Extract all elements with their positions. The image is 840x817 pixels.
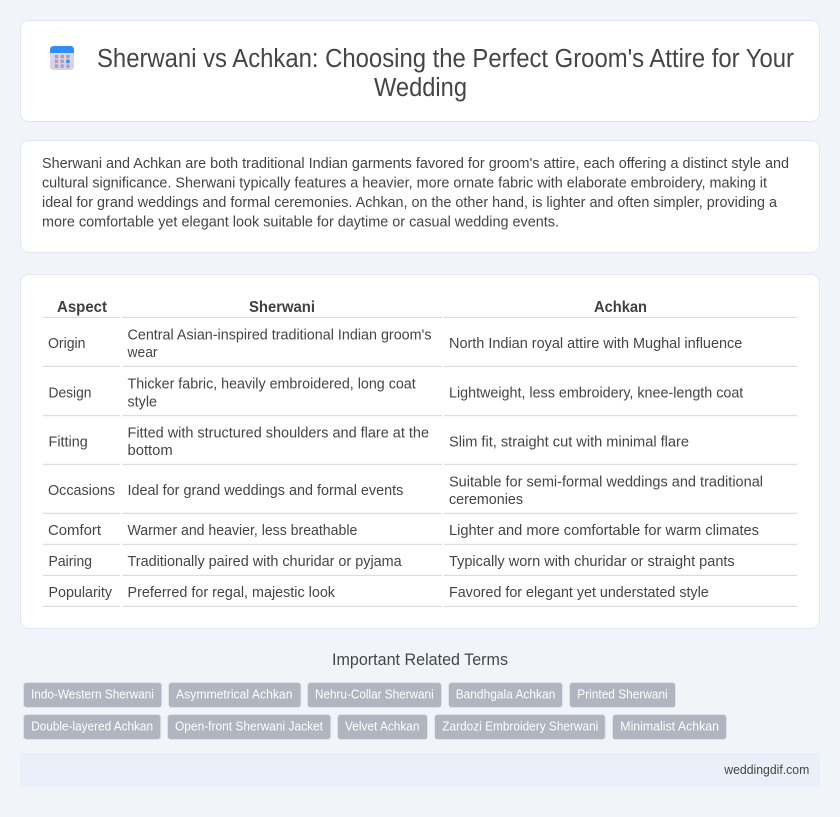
tag: Velvet Achkan: Velvet Achkan [345,719,420,734]
row: pairing: Pairing [48,554,92,570]
row: popularity: Popularity [48,585,113,601]
row: comfort: Warmer and heavier, less breathable [128,523,357,539]
row: comfort: Comfort [48,523,101,539]
footer [20,753,820,787]
row: fitting: Fitted with structured shoulders and flare at the [128,425,429,441]
panel: header [20,20,820,122]
row: design: Design [48,385,92,401]
row: origin: Central Asian-inspired traditional Indian groom's [128,327,432,343]
row: origin [48,327,742,361]
row: occasions: Ideal for grand weddings and formal events [128,483,403,499]
tag: Bandhgala Achkan [448,682,562,708]
tag: Nehru-Collar Sherwani [308,682,442,708]
row: comfort [48,523,759,539]
row: pairing [48,554,735,570]
intro text block: more comfortable yet elegant look suitable for daytime or casual wedding events. [42,214,559,230]
table header row: Achkan [594,299,647,316]
title: Wedding [374,74,467,102]
row: origin: wear [127,345,158,361]
tag: Nehru-Collar Sherwani: Nehru-Collar Sherwani [315,687,434,702]
row: origin: Origin [48,336,86,352]
row: design: style [128,394,157,410]
table header row: Aspect [57,299,108,316]
related terms heading: Important Related Terms [332,651,508,669]
row: fitting: Slim fit, straight cut with minimal flare [449,434,689,450]
panel: comparison table [20,274,820,628]
row: fitting [48,425,689,459]
row: occasions: Suitable for semi-formal weddings and traditional [449,474,763,490]
intro text block: ideal for grand weddings and formal ceremonies. Achkan, on the other hand, is lighter and often simpler, providing a [42,195,778,211]
tag: Bandhgala Achkan: Bandhgala Achkan [456,687,555,702]
footer source text: weddingdif.com [723,762,809,777]
title [97,45,794,102]
intro text block: Sherwani and Achkan are both traditional Indian garments favored for groom's attire, each offering a distinct style and [42,156,789,172]
row: comfort: Lighter and more comfortable for warm climates [449,523,759,539]
tag: Open-front Sherwani Jacket: Open-front Sherwani Jacket [175,719,323,734]
row: design [48,376,743,410]
row: occasions: ceremonies [449,492,523,508]
row: fitting: Fitting [48,434,88,450]
tag: Indo-Western Sherwani [24,682,162,708]
row: occasions: Occasions [48,483,115,499]
tag: Zardozi Embroidery Sherwani: Zardozi Embroidery Sherwani [442,719,598,734]
tag: Printed Sherwani: Printed Sherwani [577,687,668,702]
tag: Minimalist Achkan: Minimalist Achkan [620,719,719,734]
tag: Velvet Achkan [338,714,428,740]
row: occasions [48,474,763,508]
section: important related terms [24,651,726,740]
tag: Asymmetrical Achkan [168,682,301,708]
row: design: Thicker fabric, heavily embroidered, long coat [128,376,416,392]
row: popularity [48,585,709,601]
panel: introduction [20,140,820,252]
table header row: Sherwani [249,299,315,316]
tag: Double-layered Achkan [24,714,161,740]
row: fitting: bottom [128,443,173,459]
tag: Open-front Sherwani Jacket [168,714,331,740]
tag: Double-layered Achkan: Double-layered Achkan [31,719,153,734]
intro text block: cultural significance. Sherwani typically features a heavier, more ornate fabric with elaborate embroidery, making it [42,176,767,192]
tag: Zardozi Embroidery Sherwani [434,714,605,740]
row: popularity: Favored for elegant yet understated style [449,585,709,601]
table header row [57,299,647,316]
row: pairing: Traditionally paired with churidar or pyjama [128,554,403,570]
tag: Asymmetrical Achkan: Asymmetrical Achkan [176,687,292,702]
tag: Minimalist Achkan [612,714,726,740]
row: origin: North Indian royal attire with Mughal influence [449,336,742,352]
row: pairing: Typically worn with churidar or straight pants [449,554,735,570]
icon: calendar [50,46,74,70]
tag: Indo-Western Sherwani: Indo-Western Sherwani [31,687,154,702]
title: Sherwani vs Achkan: Choosing the Perfect Groom's Attire for Your [97,45,794,73]
intro text block [42,156,789,230]
tag: Printed Sherwani [570,682,676,708]
row: design: Lightweight, less embroidery, knee-length coat [449,385,743,401]
row: popularity: Preferred for regal, majestic look [128,585,336,601]
